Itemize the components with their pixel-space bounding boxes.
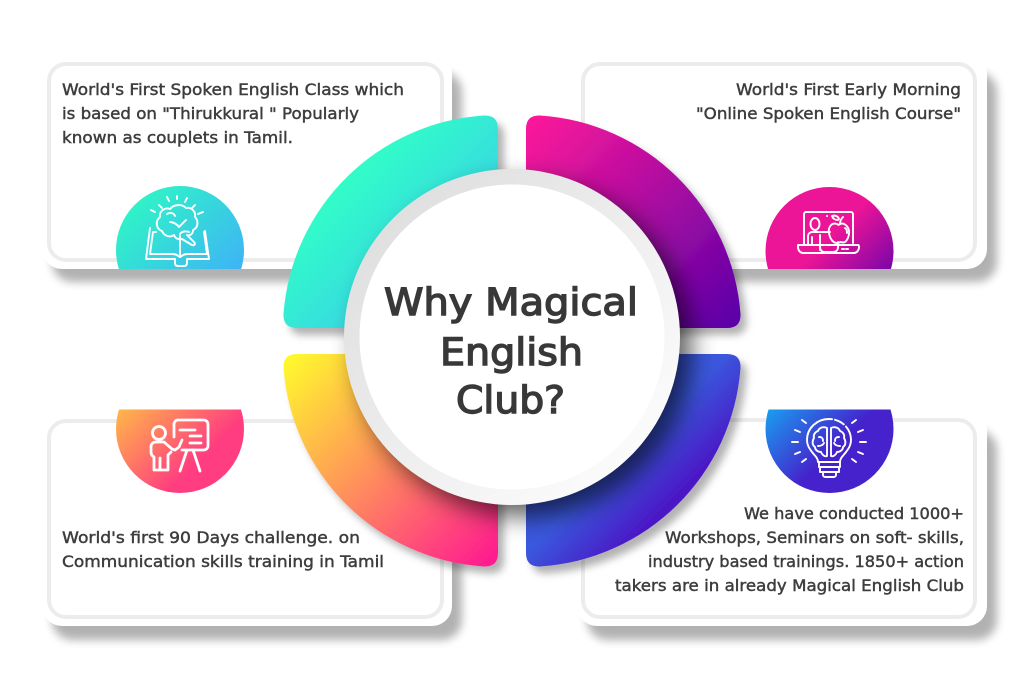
text: top-right description: World's First Early Morning	[736, 80, 961, 99]
text: bottom-right description	[615, 504, 964, 595]
panel: top-right card	[581, 62, 1002, 287]
text: top-right description: "Online Spoken English Course"	[696, 104, 961, 123]
text: top-right description	[696, 80, 961, 123]
arc: bottom-right blue-violet segment	[526, 354, 741, 567]
text: bottom-left description: Communication skills training in Tamil	[62, 552, 384, 571]
title: Why Magical	[384, 281, 638, 324]
text: bottom-left description: World's first 90 Days challenge. on	[62, 528, 360, 547]
icon badge: brain and book	[116, 186, 244, 269]
panel: top-left card	[47, 62, 467, 287]
text: bottom-right description: industry based trainings. 1850+ action	[648, 552, 964, 571]
arc: top-left teal segment	[283, 115, 498, 328]
title: English	[440, 331, 583, 374]
text: bottom-right description: We have conducted 1000+	[744, 504, 964, 523]
central circle with title	[344, 169, 692, 517]
text: bottom-right description: Workshops, Seminars on soft- skills,	[665, 528, 964, 547]
panel: bottom-right card	[581, 410, 1002, 645]
arc: top-right magenta segment	[526, 115, 741, 328]
text: top-left description: known as couplets in Tamil.	[62, 128, 293, 147]
text: top-left description: is based on "Thirukkural " Popularly	[62, 104, 359, 123]
icon badge: teacher at board	[116, 410, 244, 493]
text: top-left description: World's First Spoken English Class which	[62, 80, 404, 99]
panel: bottom-left card	[47, 410, 467, 645]
arc: bottom-left yellow-pink segment	[283, 354, 498, 567]
text: top-left description	[62, 80, 404, 147]
text: bottom-left description	[62, 528, 384, 571]
title	[384, 281, 638, 422]
icon badge: lightbulb brain	[766, 410, 894, 493]
title: Club?	[456, 379, 565, 422]
text: bottom-right description: takers are in already Magical English Club	[615, 576, 964, 595]
icon badge: online teacher laptop	[766, 187, 894, 269]
